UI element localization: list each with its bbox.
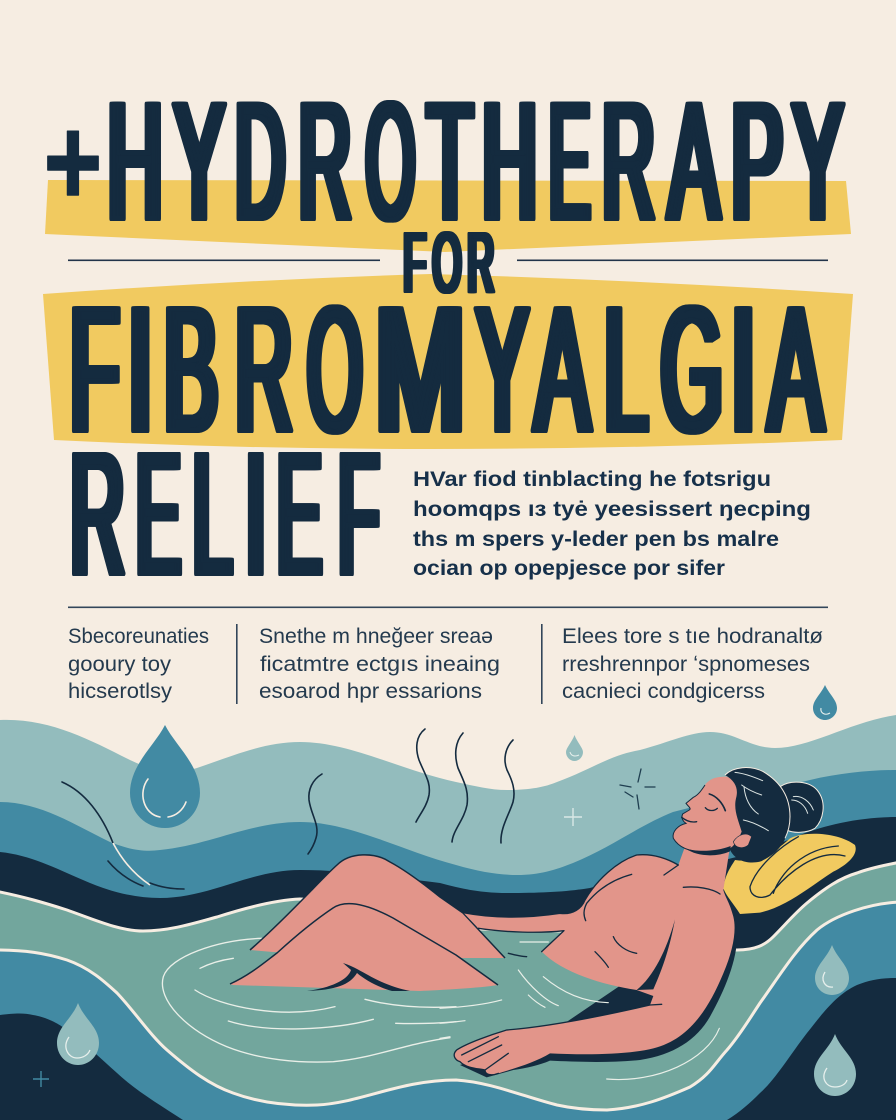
title line: fibromyalgia: R xyxy=(235,272,292,469)
pillow fold lines xyxy=(750,837,845,897)
figure: torso, arms, head, pillow xyxy=(440,768,856,1080)
title line: relief: L xyxy=(192,418,232,611)
intro paragraph: ocian op opepjesce por sifer xyxy=(413,557,725,580)
face profile outline xyxy=(673,785,705,852)
column three text: Elees tore s tıe hodranaltø xyxy=(562,625,823,648)
closed eye xyxy=(705,808,717,811)
title line: fibromyalgia: Y xyxy=(476,272,528,469)
title line: hydrotherapy: E xyxy=(549,70,590,254)
leg outlines xyxy=(230,855,505,985)
title line: fibromyalgia: L xyxy=(604,272,648,469)
title line: fibromyalgia: F xyxy=(70,272,119,469)
wave: lower blue xyxy=(0,902,896,1120)
column one text: Sbecoreunaties xyxy=(68,625,209,648)
title line: fibromyalgia: I xyxy=(731,272,756,469)
column two text: Snethe m hneğeer sreaə xyxy=(259,625,493,648)
icon: small teal drop xyxy=(566,735,583,761)
bun xyxy=(777,782,823,832)
wave: navy xyxy=(0,817,896,1120)
title line: hydrotherapy: H xyxy=(482,70,537,254)
title line: hydrotherapy: P xyxy=(732,70,783,254)
title xyxy=(44,70,843,611)
column two text: ficatmtre ectgıs ineaing xyxy=(260,653,500,676)
column three text xyxy=(562,625,823,703)
intro paragraph: hoomqps ıз tyė yeesissert ŋecping xyxy=(413,498,811,521)
chin shadow xyxy=(686,846,731,855)
title line: hydrotherapy: Y xyxy=(793,70,843,254)
title line: relief: F xyxy=(338,418,379,611)
arm shadow xyxy=(460,913,737,1077)
smile xyxy=(682,817,697,822)
title line: hydrotherapy: D xyxy=(235,70,285,254)
hair strands xyxy=(735,772,813,831)
knee shadow xyxy=(307,963,410,991)
title line: hydrotherapy: A xyxy=(669,70,719,254)
wave: light teal xyxy=(0,715,896,1120)
column one text: gooury toy xyxy=(68,653,172,676)
title plus sign: + xyxy=(44,93,102,233)
column one text xyxy=(68,625,209,703)
icon: sparkle xyxy=(620,769,655,809)
hair outline highlight xyxy=(725,768,790,838)
water ripples on torso xyxy=(440,942,719,1080)
column three text: cacnieci condgicerss xyxy=(562,680,765,703)
hair xyxy=(725,768,790,862)
column two text: esoarod hpr essarions xyxy=(259,680,482,703)
title line: fibromyalgia: A xyxy=(535,272,590,469)
intro paragraph: HVar fiod tinblacting he fotsrigu xyxy=(413,468,771,491)
title line: relief: R xyxy=(70,418,125,611)
upper leg xyxy=(250,855,505,958)
white motion line xyxy=(113,843,150,885)
title line: fibromyalgia: M xyxy=(376,272,465,469)
wave: sea green water xyxy=(0,862,896,1120)
title line: hydrotherapy: T xyxy=(427,70,473,254)
title line: fibromyalgia: B xyxy=(164,272,218,469)
water ripples left xyxy=(162,938,456,1062)
title line: hydrotherapy: O xyxy=(366,70,415,254)
icon: bottom right drop xyxy=(814,1034,856,1096)
wave: navy bottom right xyxy=(727,978,896,1120)
banner: yellow top xyxy=(45,180,851,252)
title line: fibromyalgia: G xyxy=(661,272,723,469)
title line: fibromyalgia: O xyxy=(307,272,363,469)
title line: hydrotherapy: Y xyxy=(174,70,224,254)
icon: right drop xyxy=(815,945,849,995)
title line: relief: I xyxy=(245,418,266,611)
icon: plus white xyxy=(564,808,582,826)
intro paragraph: ths m spers y-leder pen bs malre xyxy=(413,528,779,551)
icon: small blue drop near text xyxy=(813,685,837,720)
lower leg xyxy=(230,904,498,991)
column three text: rreshrennpor ʻspnomeses xyxy=(562,653,810,676)
rule left of FOR xyxy=(68,260,380,261)
icon: plus bottom left xyxy=(33,1071,49,1087)
section rule xyxy=(68,606,828,608)
title line: fibromyalgia: A xyxy=(769,272,823,469)
pillow xyxy=(723,834,856,914)
title line: relief: E xyxy=(277,418,322,611)
figure: legs xyxy=(230,855,505,991)
title line: hydrotherapy: H xyxy=(108,70,163,254)
column one text: hicserotlsy xyxy=(68,680,173,703)
ear xyxy=(733,834,752,848)
title line: fibromyalgia: I xyxy=(128,272,153,469)
banner: yellow bottom xyxy=(43,274,853,449)
rule right of FOR xyxy=(517,260,828,261)
intro paragraph xyxy=(413,468,811,580)
title line: relief: E xyxy=(136,418,181,611)
waterline mark xyxy=(508,953,527,957)
face xyxy=(673,777,747,852)
icon: large water drop xyxy=(130,725,200,828)
wave: mid blue xyxy=(0,770,896,1120)
arm inner wedge xyxy=(637,919,675,990)
column divider one xyxy=(236,624,238,704)
column divider two xyxy=(541,624,543,704)
title line: hydrotherapy: R xyxy=(602,70,655,254)
eyebrow xyxy=(709,794,725,811)
wave: navy bottom left xyxy=(0,1014,183,1120)
title line: hydrotherapy: R xyxy=(299,70,351,254)
title line: for: FOR xyxy=(403,215,494,310)
torso and arm xyxy=(454,847,735,1075)
icon: bottom left drop xyxy=(57,1003,99,1065)
body outline details xyxy=(454,855,720,1075)
steam and motion lines xyxy=(62,729,514,889)
column two text xyxy=(259,625,500,703)
